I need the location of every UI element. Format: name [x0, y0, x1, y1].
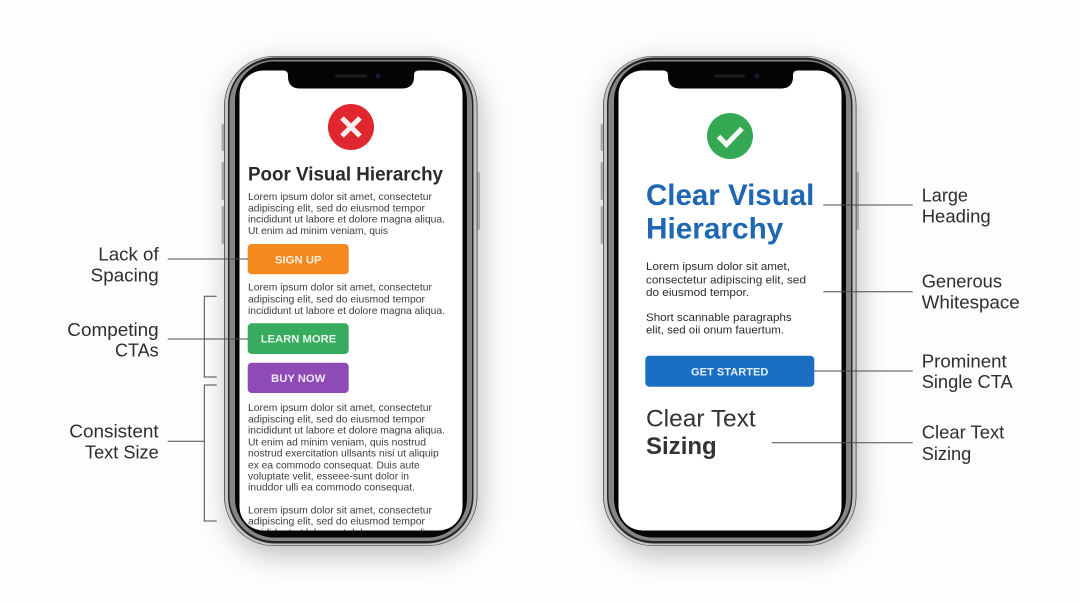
text block: first paragraph: adipiscing elit, sed do eiusmod tempor [248, 203, 426, 214]
text block: third paragraph: incididunt ut labore et dolore magna aliqua. [248, 426, 445, 437]
button: get started: GET STARTED [691, 366, 768, 378]
callout: competing CTAs [67, 296, 248, 377]
text block: second paragraph: Lorem ipsum dolor sit amet, consectetur [248, 283, 433, 294]
callout: prominent single CTA: Single CTA [922, 371, 1013, 392]
text block: short paragraph: do eiusmod tempor. [646, 287, 749, 299]
button: buy now: BUY NOW [271, 373, 326, 385]
text block: second paragraph: adipiscing elit, sed do eiusmod tempor [248, 294, 426, 305]
callout: generous whitespace: Generous [922, 270, 1002, 291]
callout: clear text sizing [772, 422, 1005, 464]
text block: third paragraph: Ut enim ad minim veniam, quis nostrud [248, 437, 426, 448]
phone: clear visual hierarchy [600, 56, 860, 556]
text block: short paragraph: Lorem ipsum dolor sit amet, [646, 261, 790, 273]
callout: prominent single CTA [814, 350, 1013, 392]
callout: generous whitespace [823, 270, 1020, 312]
button: sign up [248, 244, 349, 274]
text block: first paragraph [248, 192, 445, 237]
text block: scannable paragraph: Short scannable paragraphs [646, 312, 792, 324]
callout: lack of spacing: Lack of [98, 244, 159, 265]
text: clear text sizing sample [646, 406, 756, 460]
callout: clear text sizing: Clear Text [922, 422, 1005, 443]
icon: red cross [328, 104, 374, 150]
text block: scannable paragraph: elit, sed oii onum fauertum. [646, 325, 784, 337]
text block: first paragraph: Lorem ipsum dolor sit amet, consectetur [248, 192, 433, 203]
callout: lack of spacing: Spacing [91, 265, 159, 286]
text: clear text sizing sample: Clear Text [646, 406, 756, 433]
text block: third paragraph: adipiscing elit, sed do eiusmod tempor [248, 414, 426, 425]
text: clear text sizing sample: Sizing [646, 433, 717, 460]
button: get started [645, 356, 814, 387]
text block: clipped fourth paragraph [248, 506, 432, 530]
text block: third paragraph: Lorem ipsum dolor sit amet, consectetur [248, 403, 433, 414]
button: learn more [248, 323, 349, 354]
text block: clipped fourth paragraph: adipiscing elit, sed do eiusmod tempor [248, 517, 426, 528]
text block: clipped fourth paragraph: incididunt ut labore et dolore magna aliqua. [248, 528, 445, 539]
text block: first paragraph: Ut enim ad minim veniam, quis [248, 226, 388, 237]
callout: large heading: Large [922, 185, 968, 206]
notch [282, 70, 420, 88]
text block: third paragraph: ex ea commodo consequat. Duis aute [248, 460, 420, 471]
notch [662, 70, 799, 88]
text block: clipped fourth paragraph: Lorem ipsum dolor sit amet, consectetur [248, 505, 433, 516]
text block: third paragraph: nostrud exercitation ullsants nisi ut aliquip [248, 449, 439, 460]
icon: green check [707, 113, 753, 159]
text block: second paragraph [248, 283, 445, 317]
callout: generous whitespace: Whitespace [922, 291, 1020, 312]
callout: prominent single CTA: Prominent [922, 350, 1008, 371]
callout: competing CTAs: Competing [67, 319, 159, 340]
button: buy now [248, 363, 349, 393]
callout: consistent text size: Consistent [69, 420, 160, 441]
text block: short paragraph: consectetur adipiscing elit, sed [646, 274, 806, 286]
text block: third paragraph: voluptate velit, esseee-sunt dolor in [248, 471, 409, 482]
callout: clear text sizing: Sizing [922, 443, 971, 464]
text block: scannable paragraph [646, 312, 792, 337]
text block: second paragraph: incididunt ut labore et dolore magna aliqua. [248, 306, 445, 317]
callout: large heading [823, 185, 991, 226]
callout: consistent text size: Text Size [85, 441, 159, 462]
text block: first paragraph: incididunt ut labore et dolore magna aliqua. [248, 215, 445, 226]
button: sign up: SIGN UP [275, 254, 322, 266]
heading: poor visual hierarchy: Poor Visual Hierarchy [248, 164, 443, 186]
heading: clear visual hierarchy: Clear Visual [646, 179, 814, 212]
button: learn more: LEARN MORE [261, 334, 337, 346]
text block: short paragraph [646, 261, 806, 299]
callout: lack of spacing [91, 244, 248, 286]
text block: third paragraph: inuddor ulli ea commodo consequat. [248, 483, 415, 494]
callout: large heading: Heading [922, 205, 991, 226]
callout: competing CTAs: CTAs [115, 340, 159, 361]
text block: third paragraph [248, 403, 445, 494]
heading: clear visual hierarchy: Hierarchy [646, 212, 784, 245]
callout: consistent text size [69, 385, 217, 521]
heading: clear visual hierarchy [646, 179, 814, 245]
phone: poor visual hierarchy [222, 56, 481, 556]
